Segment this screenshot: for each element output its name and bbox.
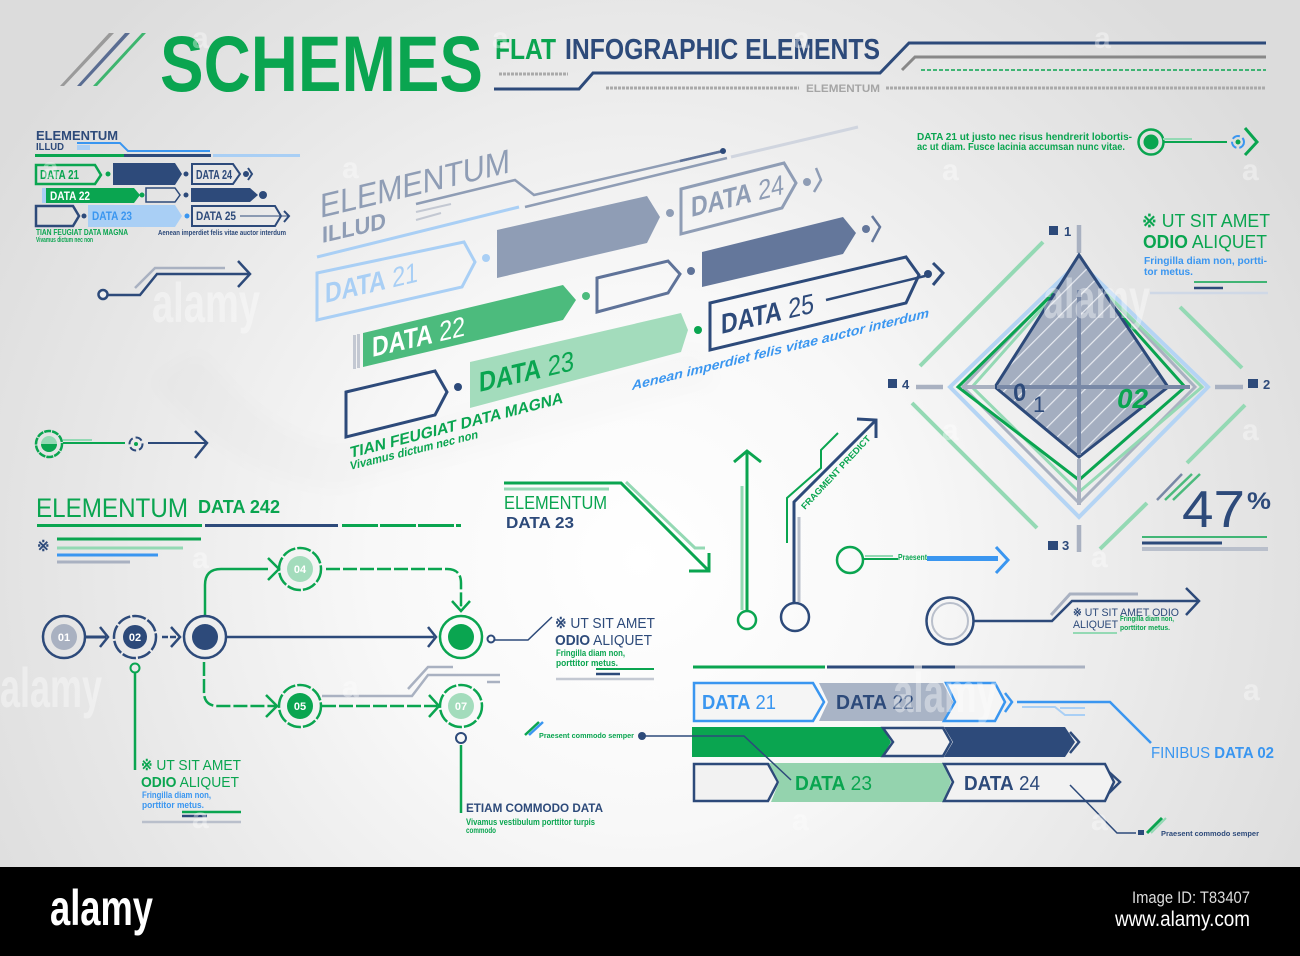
bar: data 22: DATA 22 bbox=[372, 311, 465, 364]
flow node 03 bbox=[184, 616, 226, 658]
panel: skewed data chart bbox=[317, 127, 943, 473]
flow node 07 bbox=[440, 685, 482, 743]
connector: finibus callout: FINIBUS DATA 02 bbox=[1151, 745, 1274, 762]
chevron row 1: DATA 21 bbox=[702, 692, 776, 714]
radar axis labels: 4 bbox=[902, 377, 910, 392]
watermarks: a bbox=[1242, 414, 1259, 447]
text block: flow right: ODIO ALIQUET bbox=[555, 632, 652, 649]
flow node 02: 02 bbox=[129, 632, 141, 644]
connector: left callout: Praesent commodo semper bbox=[539, 733, 634, 740]
watermarks: a bbox=[942, 154, 959, 187]
watermarks: alamy bbox=[1043, 267, 1150, 330]
chevron row 1: DATA 22 bbox=[836, 692, 914, 714]
watermarks: alamy bbox=[893, 661, 997, 724]
radar axis labels: 2 bbox=[1263, 377, 1270, 392]
text block: ut sit amet radar: ※ UT SIT AMET bbox=[1142, 211, 1270, 231]
watermarks: a bbox=[192, 802, 209, 835]
watermarks: a bbox=[492, 22, 509, 55]
header lines bbox=[494, 43, 1266, 89]
chevron row 3: DATA 23 bbox=[795, 773, 872, 795]
flow node 06 bbox=[440, 616, 494, 658]
flow node 01: 01 bbox=[58, 632, 70, 644]
arrow: green up bbox=[734, 451, 761, 629]
bar: empty navy bbox=[346, 371, 462, 437]
flow connectors bbox=[86, 558, 552, 813]
watermarks: a bbox=[192, 22, 209, 55]
text block: flow left: porttitor metus. bbox=[142, 800, 204, 810]
radar axis labels: 1 bbox=[1064, 224, 1071, 239]
text block: flow right: ※ UT SIT AMET bbox=[555, 615, 655, 632]
arrow: node arrow left bbox=[36, 431, 207, 458]
radar series polygons bbox=[950, 255, 1208, 517]
bar: empty outline bbox=[597, 261, 695, 312]
chevron row 1 bbox=[694, 683, 1012, 721]
watermarks: a bbox=[1094, 22, 1111, 55]
skewed captions: TIAN FEUGIAT DATA MAGNA bbox=[350, 389, 563, 462]
watermarks: alamy bbox=[0, 656, 102, 719]
watermarks: a bbox=[1091, 804, 1108, 837]
chevron top rule bbox=[693, 666, 1085, 668]
panel: top right note: DATA 21 ut justo nec risus hendrerit lobortis- bbox=[917, 132, 1132, 143]
watermarks: a bbox=[42, 152, 59, 185]
bar: filled slate bbox=[702, 216, 880, 287]
text block: flow left: ※ UT SIT AMET bbox=[141, 757, 241, 774]
flow node 04 bbox=[279, 548, 321, 590]
footer bar: www.alamy.com bbox=[1114, 908, 1250, 931]
arrow: big circle callout bbox=[926, 588, 1199, 644]
radar series labels: 1 bbox=[1033, 392, 1045, 417]
text block: flow right: porttitor metus. bbox=[556, 658, 618, 668]
flow node 01 bbox=[43, 616, 85, 658]
bar: data 21 bbox=[317, 242, 490, 320]
bar: filled gray bbox=[497, 196, 674, 278]
skewed heading: ELEMENTUM bbox=[320, 143, 510, 226]
chart: radar bbox=[888, 224, 1270, 553]
watermarks: a bbox=[342, 671, 359, 704]
bar: data 24: DATA 24 bbox=[691, 169, 784, 224]
text block: flow right bbox=[555, 615, 655, 679]
arrow: big circle callout: ALIQUET bbox=[1073, 619, 1118, 631]
text block: ut sit amet radar: Fringilla diam non, portti- bbox=[1144, 256, 1267, 267]
heading: elementum data 242: ※ bbox=[37, 538, 50, 555]
radar series labels: 0 bbox=[1010, 378, 1030, 408]
heading: elementum data 242: ELEMENTUM bbox=[36, 493, 188, 523]
arrow: circuit arrow top left bbox=[98, 261, 250, 299]
arrow: elementum data 23 bbox=[504, 482, 709, 571]
bar: data 21: DATA 21 bbox=[325, 257, 418, 310]
footer bar bbox=[0, 867, 1300, 956]
connector: finibus callout bbox=[1017, 702, 1274, 762]
bar: data 22 bbox=[353, 285, 590, 369]
watermarks: alamy bbox=[152, 271, 260, 334]
heading: elementum data 242 bbox=[36, 493, 461, 562]
flow node 07: 07 bbox=[455, 701, 467, 713]
stat: 47 percent bbox=[1142, 474, 1271, 549]
panel: small data chart: ELEMENTUM bbox=[36, 128, 118, 143]
stat: 47 percent: % bbox=[1247, 488, 1271, 515]
text block: ut sit amet radar: tor metus. bbox=[1144, 267, 1193, 278]
panel: small data chart: TIAN FEUGIAT DATA MAGNA bbox=[36, 228, 128, 237]
connector: left callout bbox=[525, 722, 791, 780]
text block: etiam commodo: commodo bbox=[466, 826, 496, 835]
panel: top right note bbox=[917, 128, 1257, 155]
arrow: blue praesent: Praesent bbox=[898, 553, 927, 562]
panel: small data chart: DATA 25 bbox=[196, 209, 236, 223]
skewed rule lines bbox=[317, 127, 858, 257]
watermarks: a bbox=[192, 542, 209, 575]
text block: flow right: Fringilla diam non, bbox=[556, 648, 625, 658]
connector: lower callout: Praesent commodo semper bbox=[1161, 831, 1259, 838]
flow node 02 bbox=[114, 616, 156, 672]
skewed heading bbox=[320, 143, 510, 248]
footer bar: alamy bbox=[50, 880, 153, 936]
watermarks: a bbox=[342, 152, 359, 185]
watermarks: a bbox=[643, 674, 660, 707]
radar axes bbox=[916, 225, 1243, 552]
arrow: navy diagonal up: FRAGMENT PREDICT bbox=[799, 433, 873, 511]
arrow: elementum data 23: ELEMENTUM bbox=[504, 493, 607, 513]
skewed heading: ILLUD bbox=[322, 207, 386, 248]
arrow: big circle callout: ※ UT SIT AMET ODIO bbox=[1073, 607, 1179, 619]
radar series labels bbox=[1010, 378, 1148, 417]
background panel shape bbox=[150, 345, 720, 490]
panel: chevron bars bbox=[525, 667, 1274, 838]
text block: flow left: ODIO ALIQUET bbox=[141, 774, 239, 791]
text block: etiam commodo: Vivamus vestibulum porttitor turpis bbox=[466, 817, 595, 827]
flow node 04: 04 bbox=[294, 564, 307, 576]
flow node 05 bbox=[279, 685, 321, 727]
panel: small data chart: DATA 22 bbox=[50, 189, 90, 203]
radar outer lines bbox=[912, 242, 1245, 549]
arrow: blue praesent bbox=[837, 547, 1008, 573]
text block: flow left bbox=[141, 757, 241, 822]
skewed captions bbox=[350, 305, 929, 473]
skewed captions: Aenean imperdiet felis vitae auctor interdum bbox=[631, 305, 929, 393]
panel: small data chart: ILLUD bbox=[36, 142, 64, 153]
arrow: big circle callout: Fringilla diam non, bbox=[1120, 616, 1174, 623]
panel: small data chart: DATA 23 bbox=[92, 209, 132, 223]
watermarks: a bbox=[942, 414, 959, 447]
footer bar: Image ID: T83407 bbox=[1132, 888, 1250, 907]
bar: data 24 bbox=[681, 163, 821, 234]
arrow: navy diagonal up bbox=[781, 419, 876, 631]
subtitle: FLAT bbox=[495, 34, 556, 66]
watermarks: a bbox=[793, 22, 810, 55]
title: SCHEMES bbox=[160, 19, 483, 108]
watermarks: a bbox=[1243, 674, 1260, 707]
watermarks: a bbox=[1091, 541, 1108, 574]
watermarks: a bbox=[792, 804, 809, 837]
radar series labels: 02 bbox=[1117, 383, 1148, 414]
stat: 47 percent: 47 bbox=[1182, 481, 1245, 539]
text block: etiam commodo: ETIAM COMMODO DATA bbox=[466, 801, 603, 815]
panel: small data chart: Vivamus dictum nec non bbox=[36, 237, 93, 244]
icon: title slashes bbox=[60, 33, 146, 86]
flow node 05: 05 bbox=[294, 701, 306, 713]
panel: small data chart: Aenean imperdiet felis vitae auctor interdum bbox=[158, 230, 286, 237]
chevron row 3 bbox=[694, 763, 1120, 802]
panel: small data chart: DATA 24 bbox=[196, 167, 233, 182]
bar: data 23 bbox=[470, 313, 702, 408]
heading: elementum data 242: DATA 242 bbox=[198, 497, 280, 517]
flow diagram bbox=[43, 548, 552, 813]
panel: top right note: ac ut diam. Fusce lacinia accumsan nunc vitae. bbox=[917, 142, 1125, 153]
chevron row 2 bbox=[692, 727, 1079, 757]
text block: flow left: Fringilla diam non, bbox=[142, 790, 211, 800]
arrow: big circle callout: porttitor metus. bbox=[1120, 625, 1170, 632]
text block: ut sit amet radar: ODIO ALIQUET bbox=[1143, 232, 1267, 252]
text block: ut sit amet radar bbox=[1142, 211, 1270, 293]
text block: etiam commodo bbox=[466, 801, 603, 835]
radar axis labels: 3 bbox=[1062, 538, 1069, 553]
bar: data 25: DATA 25 bbox=[721, 288, 814, 341]
chevron row 3: DATA 24 bbox=[964, 773, 1040, 795]
arrow: elementum data 23: DATA 23 bbox=[506, 515, 574, 532]
panel: small data chart: DATA 21 bbox=[40, 167, 79, 182]
header label: ELEMENTUM bbox=[806, 83, 880, 95]
bar: data 23: DATA 23 bbox=[479, 345, 574, 399]
skewed captions: Vivamus dictum nec non bbox=[350, 427, 478, 473]
connector: lower callout bbox=[1070, 785, 1259, 838]
subtitle: INFOGRAPHIC ELEMENTS bbox=[565, 34, 880, 66]
radar axis labels bbox=[888, 224, 1270, 553]
panel: small data chart bbox=[35, 128, 300, 244]
watermarks: a bbox=[1242, 154, 1259, 187]
bar: data 25 bbox=[710, 257, 943, 350]
